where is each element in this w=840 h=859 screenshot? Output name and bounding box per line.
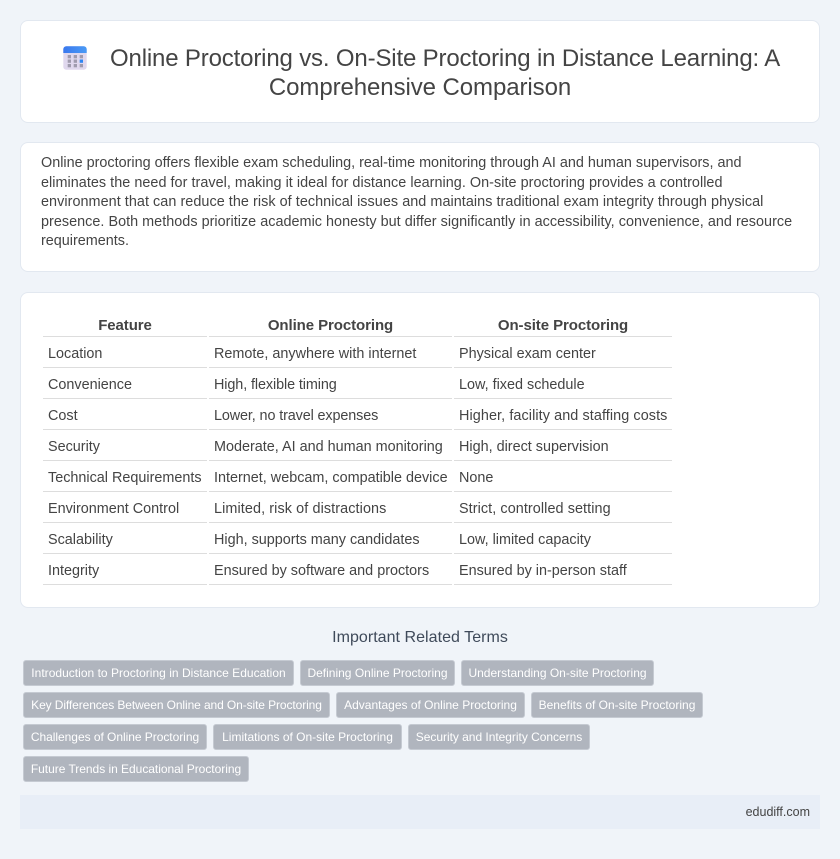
row: convenience: Low, fixed schedule bbox=[459, 377, 585, 393]
row: technical requirements bbox=[43, 470, 672, 492]
row: cost bbox=[43, 408, 672, 430]
intro text: eliminates the need for travel, making it ideal for distance learning. On-site proctoring provides a controlled bbox=[41, 175, 723, 191]
row: integrity: Ensured by in-person staff bbox=[459, 563, 627, 579]
row: location: Location bbox=[48, 346, 102, 362]
related term tags: Limitations of On-site Proctoring bbox=[222, 730, 393, 744]
row: integrity: Ensured by software and proctors bbox=[214, 563, 429, 579]
row: cost: Higher, facility and staffing costs bbox=[459, 408, 667, 424]
row: security: Moderate, AI and human monitoring bbox=[214, 439, 443, 455]
row: technical requirements: None bbox=[459, 470, 493, 486]
table header: online: Online Proctoring bbox=[268, 317, 393, 334]
row: scalability bbox=[43, 532, 672, 554]
table header: feature bbox=[43, 316, 207, 337]
table header: on-site: On-site Proctoring bbox=[498, 317, 628, 334]
related term tags bbox=[23, 660, 703, 782]
heading: important related terms: Important Related Terms bbox=[332, 629, 508, 646]
panel: introduction bbox=[20, 142, 820, 272]
row: convenience bbox=[43, 377, 672, 399]
related term tags: Challenges of Online Proctoring bbox=[31, 730, 199, 744]
row: security: High, direct supervision bbox=[459, 439, 609, 455]
row: integrity bbox=[43, 563, 672, 585]
intro text: requirements. bbox=[41, 233, 129, 249]
row: technical requirements: Internet, webcam, compatible device bbox=[214, 470, 448, 486]
related term tags: Defining Online Proctoring bbox=[307, 666, 448, 680]
row: location: Physical exam center bbox=[459, 346, 596, 362]
related term tags: Key Differences Between Online and On-site Proctoring bbox=[31, 698, 322, 712]
panel: title header bbox=[20, 20, 820, 123]
table header: feature: Feature bbox=[98, 317, 152, 334]
panel: comparison table bbox=[20, 292, 820, 608]
row: scalability: High, supports many candidates bbox=[214, 532, 420, 548]
row: convenience: High, flexible timing bbox=[214, 377, 337, 393]
related term tags: Benefits of On-site Proctoring bbox=[539, 698, 695, 712]
related term tags: Future Trends in Educational Proctoring bbox=[31, 762, 241, 776]
icon: calendar bbox=[63, 46, 87, 70]
row: technical requirements: Technical Requirements bbox=[48, 470, 202, 486]
row: cost: Lower, no travel expenses bbox=[214, 408, 378, 424]
title line 2: Comprehensive Comparison bbox=[269, 74, 571, 101]
row: location: Remote, anywhere with internet bbox=[214, 346, 416, 362]
footer credit: edudiff.com bbox=[746, 805, 810, 819]
row: environment control: Limited, risk of distractions bbox=[214, 501, 386, 517]
related term tags: Introduction to Proctoring in Distance Education bbox=[31, 666, 286, 680]
row: integrity: Integrity bbox=[48, 563, 99, 579]
intro text: Online proctoring offers flexible exam scheduling, real-time monitoring through AI and human supervisors, and bbox=[41, 155, 741, 171]
row: environment control: Strict, controlled setting bbox=[459, 501, 611, 517]
table header: online bbox=[209, 316, 452, 337]
row: convenience: Convenience bbox=[48, 377, 132, 393]
table header: on-site bbox=[454, 316, 672, 337]
row: location bbox=[43, 346, 672, 368]
row: security bbox=[43, 439, 672, 461]
related term tags: Security and Integrity Concerns bbox=[416, 730, 582, 744]
row: scalability: Low, limited capacity bbox=[459, 532, 591, 548]
footer bar bbox=[20, 795, 820, 829]
related term tags: Advantages of Online Proctoring bbox=[344, 698, 517, 712]
intro text: presence. Both methods prioritize academic honesty but differ significantly in accessibility, convenience, and resource bbox=[41, 214, 792, 230]
title line 1: Online Proctoring vs. On-Site Proctoring in Distance Learning: A bbox=[110, 45, 780, 72]
intro text: environment that can reduce the risk of technical issues and maintains traditional exam integrity through physical bbox=[41, 194, 763, 210]
row: environment control: Environment Control bbox=[48, 501, 179, 517]
row: scalability: Scalability bbox=[48, 532, 113, 548]
intro text bbox=[41, 155, 792, 249]
row: security: Security bbox=[48, 439, 100, 455]
row: cost: Cost bbox=[48, 408, 78, 424]
related term tags: Understanding On-site Proctoring bbox=[468, 666, 647, 680]
row: environment control bbox=[43, 501, 672, 523]
